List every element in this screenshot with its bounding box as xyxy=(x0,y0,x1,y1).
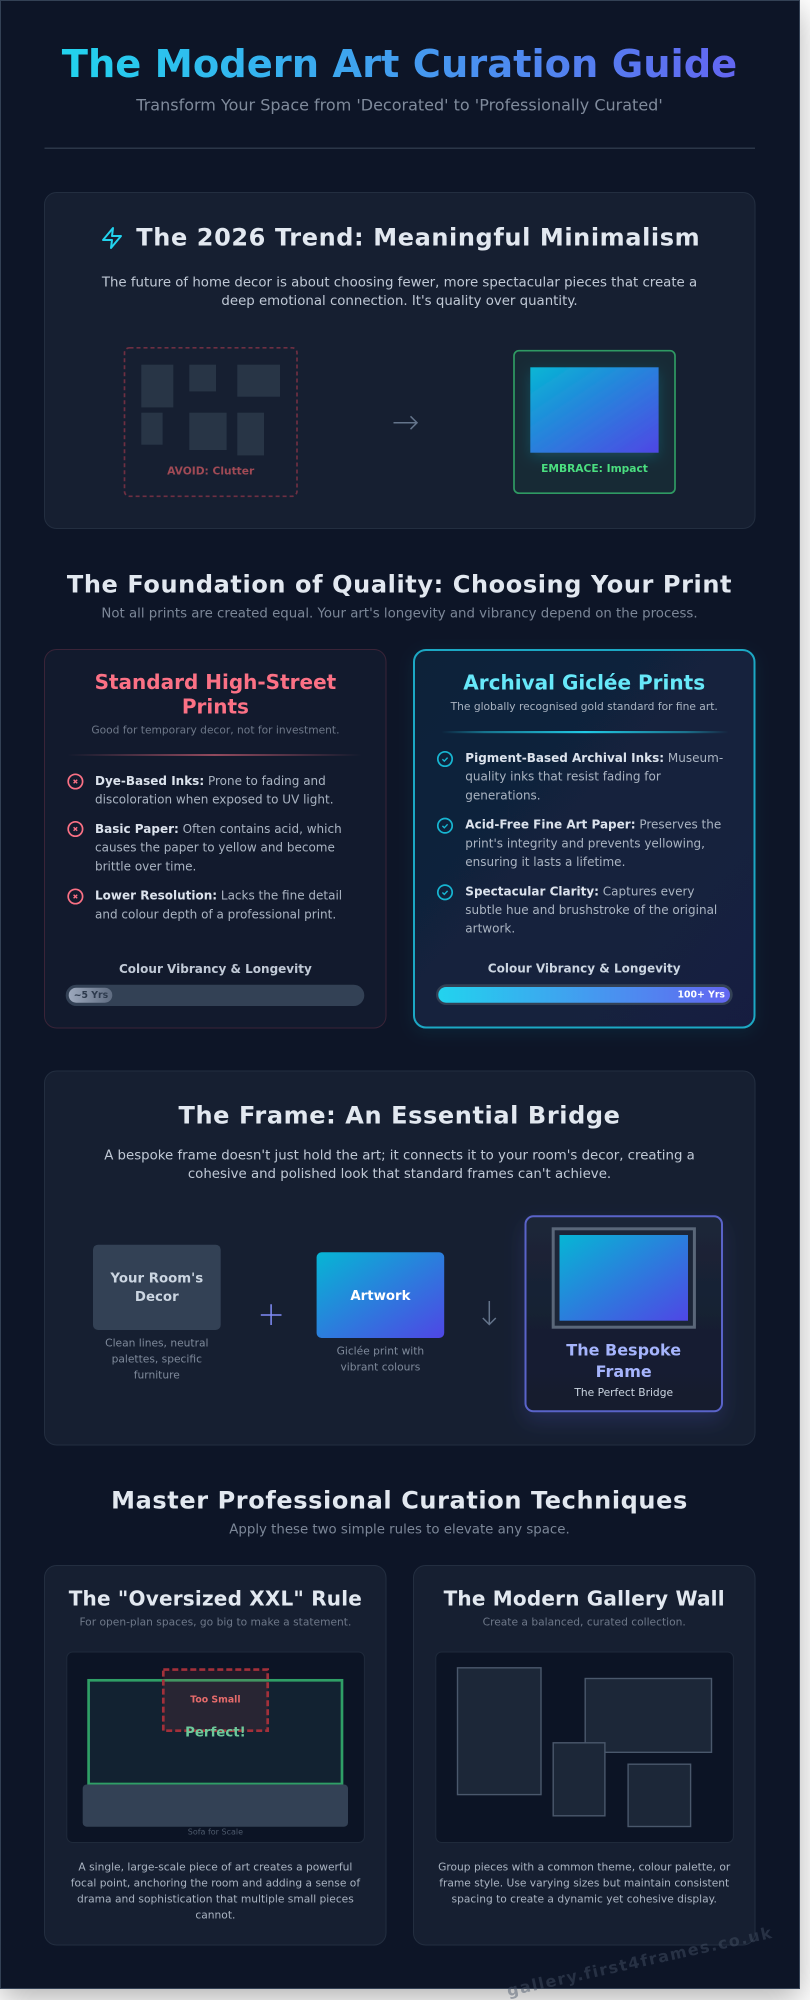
icon: lightning bolt xyxy=(103,228,121,248)
item: spectacular clarity: artwork. xyxy=(465,922,515,936)
item: acid-free paper xyxy=(438,818,721,869)
label: avoid: AVOID: Clutter xyxy=(167,464,255,478)
section subtitle: Not all prints are created equal. Your art's longevity and vibrancy depend on the process. xyxy=(101,606,698,622)
caption: palettes, specific xyxy=(112,1352,202,1366)
title: The Modern Art Curation Guide xyxy=(62,42,737,87)
item: pigment inks: generations. xyxy=(465,788,541,802)
caption: Giclée print with xyxy=(337,1344,424,1358)
section heading: foundation of quality xyxy=(67,570,732,622)
caption: Clean lines, neutral xyxy=(105,1336,208,1350)
result caption: The Perfect Bridge xyxy=(573,1386,673,1399)
meter track xyxy=(436,984,733,1005)
step: artwork xyxy=(317,1252,444,1374)
step: room decor: Decor xyxy=(135,1290,179,1305)
tagline: Create a balanced, curated collection. xyxy=(483,1616,686,1628)
icon: check xyxy=(438,885,452,900)
header xyxy=(62,42,737,114)
item: dye-based inks xyxy=(68,774,334,807)
heading: The Frame: An Essential Bridge xyxy=(178,1102,621,1130)
step: room decor: Your Room's xyxy=(109,1272,203,1286)
panel background xyxy=(44,1566,386,1945)
watermark: gallery.first4frames.co.uk xyxy=(505,1923,775,2000)
result title: Frame xyxy=(596,1362,652,1381)
meter label: Colour Vibrancy & Longevity xyxy=(488,961,681,975)
diagram: gallery wall xyxy=(436,1652,733,1842)
item: lower resolution: Lacks the fine detail xyxy=(221,889,342,903)
heading: The "Oversized XXL" Rule xyxy=(69,1586,362,1610)
item: dye-based inks: discoloration when exposed to UV light. xyxy=(95,793,334,807)
section heading: curation techniques xyxy=(111,1486,688,1538)
heading: Standard High-Street xyxy=(95,670,337,694)
sofa xyxy=(83,1784,348,1827)
step: room decor xyxy=(93,1245,221,1382)
item: lower resolution: Lower Resolution: xyxy=(95,889,217,903)
icon: cross xyxy=(68,822,83,836)
item: lower resolution xyxy=(68,889,342,921)
tagline: For open-plan spaces, go big to make a statement. xyxy=(79,1616,351,1628)
item: basic paper: brittle over time. xyxy=(95,859,196,873)
item: acid-free paper: Preserves the xyxy=(639,818,721,832)
panel background xyxy=(44,1071,755,1445)
panel: standard high-street prints xyxy=(44,650,386,1028)
heading: Prints xyxy=(182,694,249,718)
item: pigment inks xyxy=(438,751,723,802)
panel background xyxy=(414,650,754,1028)
result title: The Bespoke xyxy=(566,1340,681,1360)
meter value: 100+ Yrs xyxy=(678,990,725,1000)
item: spectacular clarity: subtle hue and brushstroke of the original xyxy=(465,903,717,917)
diagram: art scale over sofa xyxy=(67,1652,364,1842)
perfect label: Perfect! xyxy=(185,1726,246,1740)
item: acid-free paper: ensuring it lasts a lifetime. xyxy=(465,855,625,869)
description: drama and sophistication that multiple small pieces xyxy=(77,1892,354,1906)
meter fill xyxy=(69,988,112,1003)
too small artwork: Too Small xyxy=(190,1694,241,1706)
item: dye-based inks: Dye-Based Inks: xyxy=(95,774,204,788)
description: A bespoke frame doesn't just hold the art; it connects it to your room's decor, creating a xyxy=(104,1148,695,1164)
caption: furniture xyxy=(134,1368,180,1382)
diagram: embrace impact xyxy=(514,351,675,493)
item: pigment inks: Pigment-Based Archival Inks: xyxy=(465,751,664,765)
item: pigment inks: Museum- xyxy=(668,751,723,765)
item: pigment inks: quality inks that resist fading for xyxy=(465,770,661,784)
panel background xyxy=(414,1566,755,1945)
arrow: right xyxy=(394,416,417,429)
section heading: foundation of quality: The Foundation of Quality: Choosing Your Print xyxy=(67,570,732,598)
large artwork xyxy=(89,1680,342,1784)
meter value: ~5 Yrs xyxy=(74,990,109,1001)
section subtitle: Apply these two simple rules to elevate any space. xyxy=(229,1522,570,1538)
frame with artwork xyxy=(553,1229,694,1327)
item: spectacular clarity: Captures every xyxy=(603,884,694,898)
result: bespoke frame xyxy=(526,1216,722,1411)
panel: oversized xxl rule xyxy=(44,1566,386,1945)
icon: cross xyxy=(68,774,83,789)
icon: check xyxy=(438,752,452,766)
icon: check xyxy=(438,818,452,833)
panel: modern gallery wall xyxy=(414,1566,755,1945)
panel background xyxy=(44,192,755,528)
description: cohesive and polished look that standard frames can't achieve. xyxy=(188,1167,611,1182)
item: basic paper: Often contains acid, which xyxy=(183,822,342,836)
item: basic paper: Basic Paper: xyxy=(95,822,179,836)
meter track xyxy=(66,985,364,1006)
description: spacing to create a dynamic yet cohesive display. xyxy=(452,1892,717,1906)
sofa label: Sofa for Scale xyxy=(188,1828,243,1836)
step: artwork: Artwork xyxy=(350,1289,412,1304)
section heading: curation techniques: Master Professional Curation Techniques xyxy=(111,1486,688,1514)
panel: the 2026 trend xyxy=(44,192,755,528)
heading: The 2026 Trend: Meaningful Minimalism xyxy=(136,224,700,252)
intro text: The future of home decor is about choosing fewer, more spectacular pieces that create a xyxy=(101,276,697,290)
meter label: Colour Vibrancy & Longevity xyxy=(119,962,312,976)
heading: Archival Giclée Prints xyxy=(463,670,705,694)
item: acid-free paper: print's integrity and prevents yellowing, xyxy=(465,836,705,850)
icon: cross xyxy=(68,889,83,904)
label: embrace: EMBRACE: Impact xyxy=(541,462,648,475)
longevity meter: standard xyxy=(66,962,364,1006)
tagline: The globally recognised gold standard for fine art. xyxy=(450,700,718,713)
panel: the frame xyxy=(44,1071,755,1445)
item: spectacular clarity: Spectacular Clarity: xyxy=(465,884,599,898)
arrow: down xyxy=(483,1301,496,1324)
diagram: avoid clutter xyxy=(124,348,297,496)
description: A single, large-scale piece of art creates a powerful xyxy=(78,1860,352,1874)
subtitle: Transform Your Space from 'Decorated' to 'Professionally Curated' xyxy=(135,96,663,114)
item: basic paper: causes the paper to yellow and become xyxy=(95,841,335,855)
item: basic paper xyxy=(68,822,342,873)
caption: vibrant colours xyxy=(340,1360,421,1374)
tagline: Good for temporary decor, not for investment. xyxy=(91,724,339,736)
item: lower resolution: and colour depth of a professional print. xyxy=(95,907,336,921)
item: dye-based inks: Prone to fading and xyxy=(208,774,326,788)
too small artwork xyxy=(163,1670,268,1731)
description: cannot. xyxy=(195,1908,235,1922)
item: spectacular clarity xyxy=(438,884,717,936)
item: acid-free paper: Acid-Free Fine Art Paper: xyxy=(465,818,636,832)
description: Group pieces with a common theme, colour palette, or xyxy=(438,1860,731,1874)
heading: The Modern Gallery Wall xyxy=(444,1586,725,1610)
panel: archival giclee prints xyxy=(414,650,754,1028)
icon: plus xyxy=(261,1304,282,1325)
panel background xyxy=(44,650,386,1028)
description: frame style. Use varying sizes but maintain consistent xyxy=(439,1876,729,1890)
intro text: deep emotional connection. It's quality over quantity. xyxy=(221,294,578,309)
description: focal point, anchoring the room and adding a sense of xyxy=(71,1876,360,1890)
longevity meter: archival xyxy=(436,961,733,1005)
meter fill xyxy=(438,987,730,1003)
